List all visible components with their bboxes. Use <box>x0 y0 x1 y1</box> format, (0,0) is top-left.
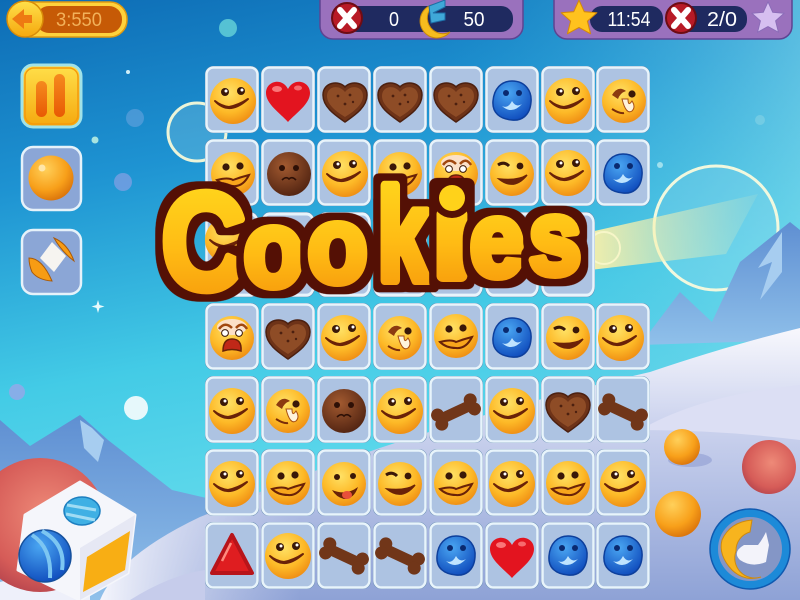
tile: smiley <box>541 139 595 206</box>
title: Cookies: o <box>307 185 368 305</box>
row 6 <box>205 449 650 516</box>
tile: heart <box>485 522 539 589</box>
tile: smiley <box>596 303 650 370</box>
row 1 <box>205 66 650 133</box>
tile: smiley <box>317 139 371 206</box>
title: Cookies <box>161 162 581 319</box>
tile: red triangle <box>205 522 259 589</box>
title: Cookies: o <box>243 189 304 309</box>
row 2 <box>205 139 650 206</box>
tile: chocolate face <box>261 139 315 206</box>
tile: grin <box>373 139 427 206</box>
stats panel top centre: 0 <box>389 9 399 31</box>
power-up button: orange ball <box>22 147 81 210</box>
tile: smiley <box>541 66 595 133</box>
ring planet left <box>168 103 226 161</box>
tile: smiley <box>261 522 315 589</box>
tile: blue face <box>485 66 539 133</box>
tile: grin <box>429 303 483 370</box>
row 4 <box>205 303 650 370</box>
pause button <box>22 65 81 127</box>
tile: smiley <box>205 449 259 516</box>
tile: tongue face <box>317 449 371 516</box>
snow hills <box>0 328 800 600</box>
row 5 <box>205 376 650 443</box>
red sphere behind cube <box>0 458 107 592</box>
title: Cookies: C <box>161 165 246 319</box>
tile: dripping face <box>373 303 427 370</box>
tile: bone <box>317 522 371 589</box>
tile: smiley <box>205 212 259 297</box>
tile: dripping face <box>596 66 650 133</box>
tile: smiley <box>205 376 259 443</box>
tile: smiley <box>205 66 259 133</box>
score panel top left <box>7 1 127 37</box>
large planet and light beam <box>588 166 778 290</box>
tile: grin <box>261 449 315 516</box>
replay button <box>710 509 790 589</box>
stats panel top centre: 50 <box>464 9 484 31</box>
tile: blue face <box>429 522 483 589</box>
tile: cookie heart <box>373 66 427 133</box>
stats panel top centre <box>320 0 523 39</box>
mountains right <box>640 222 800 345</box>
tile: smiley <box>596 449 650 516</box>
tile: hidden <box>261 212 315 297</box>
tile: cookie heart <box>541 376 595 443</box>
tile: hidden <box>541 212 595 297</box>
tile: hidden <box>429 212 483 297</box>
stats panel top right: 11:54 <box>608 9 650 31</box>
title: Cookies: e <box>470 180 524 299</box>
tile: grin <box>541 449 595 516</box>
mountains left <box>0 415 215 600</box>
tile: winking face <box>373 449 427 516</box>
tile: cookie heart <box>261 303 315 370</box>
tile: scared face <box>429 139 483 206</box>
tile: blue face <box>596 139 650 206</box>
tile: blue face <box>485 303 539 370</box>
tile: dripping face <box>261 376 315 443</box>
tile: smiley <box>485 449 539 516</box>
tile: blue face <box>541 522 595 589</box>
title: Cookies: k <box>378 162 429 308</box>
stats panel top right: 2/0 <box>707 9 737 31</box>
row 3 behind title <box>205 212 595 297</box>
toy cube <box>18 482 135 600</box>
tile: grin <box>429 449 483 516</box>
tile: cookie heart <box>429 66 483 133</box>
tile: smiley <box>485 376 539 443</box>
title: Cookies: s <box>529 179 581 297</box>
tile grid <box>205 66 650 589</box>
tile: scared face <box>205 303 259 370</box>
tile: heart <box>261 66 315 133</box>
tile: hidden <box>485 212 539 297</box>
tile: winking face <box>541 303 595 370</box>
power-up button: hammer <box>22 230 81 294</box>
orange spheres <box>655 429 712 537</box>
tile: hidden <box>373 212 427 297</box>
tile: blue face <box>596 522 650 589</box>
tile: cookie heart <box>317 66 371 133</box>
red sphere right <box>742 440 796 494</box>
tile: bone <box>596 376 650 443</box>
tile: grin <box>205 139 259 206</box>
stats panel top right <box>554 0 792 39</box>
title: Cookies: i <box>434 171 470 302</box>
score panel top left: 3:550 <box>56 10 102 31</box>
tile: smiley <box>317 303 371 370</box>
decorative bubbles and dots <box>9 19 765 420</box>
tile: chocolate face <box>317 376 371 443</box>
tile: winking face <box>485 139 539 206</box>
tile: smiley <box>373 376 427 443</box>
tile: bone <box>373 522 427 589</box>
row 7 <box>205 522 650 589</box>
tile: bone <box>429 376 483 443</box>
tile: hidden <box>317 212 371 297</box>
